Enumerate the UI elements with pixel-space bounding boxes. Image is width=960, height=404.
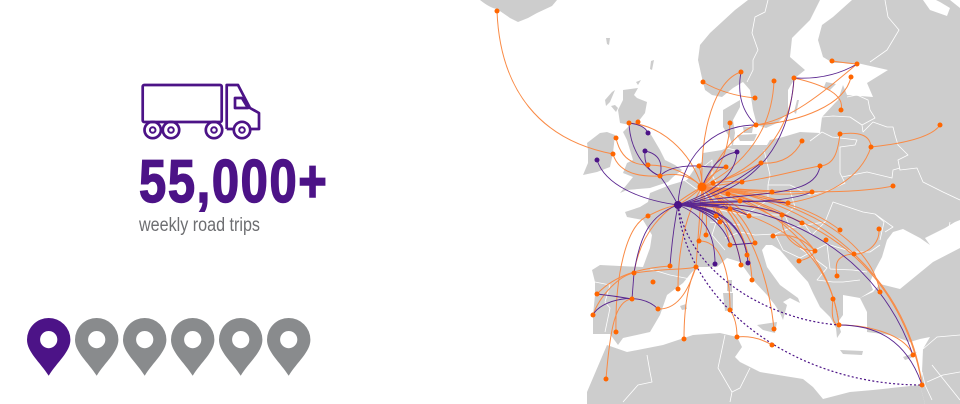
route lines: orange <box>497 11 940 385</box>
pin: highlighted <box>27 318 70 376</box>
pin: grey 3 <box>171 318 214 376</box>
pin: grey 1 <box>75 318 118 376</box>
pin: grey 5 <box>267 318 310 376</box>
purple destination dots <box>594 130 750 266</box>
pin: grey 4 <box>219 318 262 376</box>
purple hub <box>674 201 682 209</box>
dashed sea routes <box>678 205 922 385</box>
caption: weekly road trips <box>138 215 260 236</box>
white sea <box>923 0 960 16</box>
map of Europe <box>480 0 960 404</box>
route lines: purple <box>593 64 922 385</box>
orange destination dots <box>494 8 942 388</box>
icon: truck <box>143 85 259 138</box>
headline number: 55,000+ <box>139 147 328 215</box>
country borders <box>595 0 960 402</box>
pin: grey 2 <box>123 318 166 376</box>
orange hub <box>698 182 706 192</box>
location pins <box>27 318 310 376</box>
